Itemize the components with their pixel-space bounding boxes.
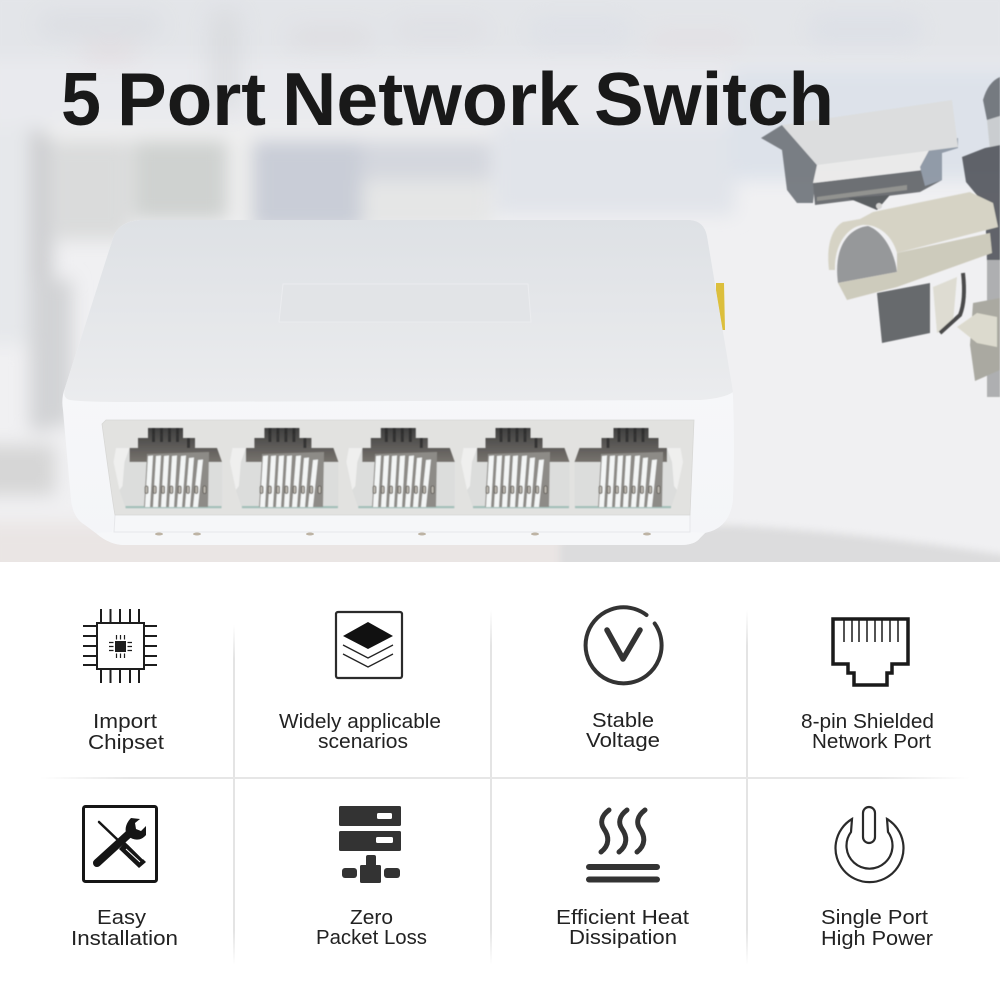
port 5 <box>574 428 683 508</box>
feature: efficient heat dissipation <box>556 810 689 949</box>
icon: power button <box>836 807 903 882</box>
feature: single port high power <box>821 807 933 950</box>
title: Port <box>117 57 266 141</box>
label: 8-pin shielded network port: Network Port <box>812 730 931 753</box>
yellow side tab <box>716 283 725 330</box>
label: 8-pin shielded network port: 8-pin Shielded <box>801 710 934 733</box>
title: 5 <box>61 57 101 141</box>
features panel <box>0 562 1000 1000</box>
icon: heat waves <box>589 810 657 880</box>
network switch device <box>62 220 734 545</box>
lower front strip <box>97 514 705 545</box>
port 1 <box>114 428 222 508</box>
label: easy installation: Easy <box>97 906 147 929</box>
label recess <box>279 284 531 322</box>
port 3 <box>346 428 455 508</box>
label: stable voltage: Voltage <box>586 729 660 752</box>
blurred background photo <box>0 0 1000 582</box>
icon: server network <box>339 806 401 883</box>
icon: rj45 port <box>833 619 908 685</box>
icon: voltage dial <box>586 607 662 683</box>
label: efficient heat dissipation: Efficient Heat <box>556 906 689 929</box>
icon: layers <box>336 612 402 678</box>
feature: easy installation <box>71 806 178 950</box>
label: single port high power: Single Port <box>821 906 928 929</box>
icon: tools <box>84 806 156 882</box>
title: Network <box>282 57 579 141</box>
status LEDs <box>155 532 651 536</box>
label: import chipset: Import <box>93 710 157 733</box>
feature: 8-pin shielded network port <box>801 619 934 753</box>
background security cameras <box>761 77 1000 397</box>
feature: import chipset <box>83 609 164 754</box>
lower camera <box>828 192 998 347</box>
port 4 <box>461 428 570 508</box>
label: import chipset: Chipset <box>88 731 164 754</box>
feature: widely applicable scenarios <box>279 612 441 753</box>
pole and mount <box>962 77 1000 397</box>
icon: chip <box>83 609 157 683</box>
upper camera <box>761 100 958 210</box>
label: efficient heat dissipation: Dissipation <box>569 926 677 949</box>
label: stable voltage: Stable <box>592 709 654 732</box>
port bay <box>102 420 694 515</box>
label: widely applicable scenarios: scenarios <box>318 730 408 753</box>
label: easy installation: Installation <box>71 927 178 950</box>
label: widely applicable scenarios: Widely applicable <box>279 710 441 733</box>
label: zero packet loss: Packet Loss <box>316 926 427 949</box>
feature: zero packet loss <box>316 806 427 949</box>
label: zero packet loss: Zero <box>350 906 393 929</box>
ethernet ports <box>114 428 683 508</box>
label: single port high power: High Power <box>821 927 933 950</box>
switch body <box>62 220 734 545</box>
title: Switch <box>594 57 834 141</box>
port 2 <box>230 428 338 508</box>
switch top face <box>64 220 733 402</box>
feature: stable voltage <box>586 607 662 752</box>
